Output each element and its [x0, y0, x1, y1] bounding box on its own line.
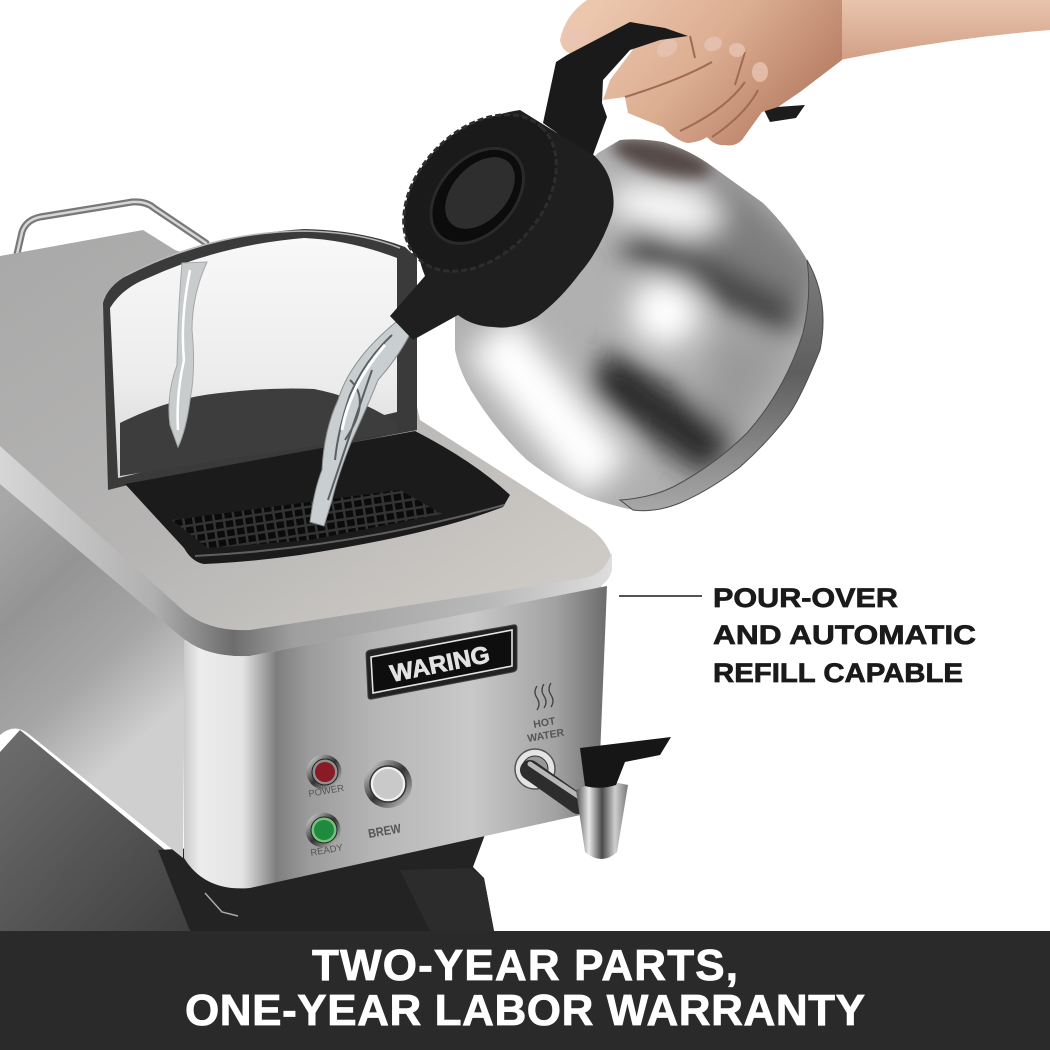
pouring water stream: [310, 322, 412, 526]
callout text: REFILL CAPABLE: [713, 658, 963, 688]
icon: rear carry handle: [17, 202, 206, 254]
callout leader line: [619, 595, 702, 597]
callout text: POUR-OVER: [713, 583, 898, 613]
lid with ridged edge: [373, 85, 587, 301]
dark underside: [0, 730, 190, 931]
carafe base rim: [620, 260, 823, 511]
finger nails: [565, 27, 768, 82]
ready light: READY: [310, 842, 344, 859]
power light: POWER: [308, 783, 345, 800]
left side panel: [0, 478, 185, 858]
banner heading: ONE-YEAR LABOR WARRANTY: [185, 986, 865, 1035]
hot water tap: [515, 737, 671, 859]
power light: [306, 754, 345, 800]
banner heading: TWO-YEAR PARTS,: [312, 941, 738, 990]
brand badge: WARING: [388, 641, 492, 688]
brand badge: [366, 625, 517, 699]
water reservoir window: [103, 229, 417, 490]
hand holding carafe: [560, 0, 1050, 145]
black base foot: [158, 832, 494, 931]
callout text: AND AUTOMATIC: [713, 620, 976, 650]
ready light: [306, 812, 344, 859]
thermal carafe: [390, 110, 824, 512]
front panel: [184, 586, 607, 888]
hot water label: HOT: [532, 715, 557, 731]
brew button: [364, 760, 412, 841]
water reflection: [169, 262, 207, 447]
callout text: [713, 583, 976, 688]
coffee brewer: [0, 202, 671, 931]
callout: pour-over feature: [619, 583, 976, 688]
top edge lip: [0, 446, 612, 656]
pour-in tray: [125, 431, 510, 564]
top surface: [0, 230, 612, 640]
carafe handle: [543, 22, 688, 155]
black shoulder and spout: [390, 110, 614, 340]
brew button: BREW: [367, 821, 402, 841]
finger creases: [625, 36, 758, 137]
warranty banner: [0, 931, 1050, 1050]
banner background: [0, 931, 1050, 1050]
banner heading: [185, 941, 865, 1035]
hot water label: [526, 683, 566, 745]
arm: [825, 0, 1050, 60]
steel carafe body: [455, 139, 808, 510]
hot water label: WATER: [526, 727, 566, 745]
palm and fingers: [560, 0, 842, 145]
carafe handle tip: [763, 105, 805, 122]
